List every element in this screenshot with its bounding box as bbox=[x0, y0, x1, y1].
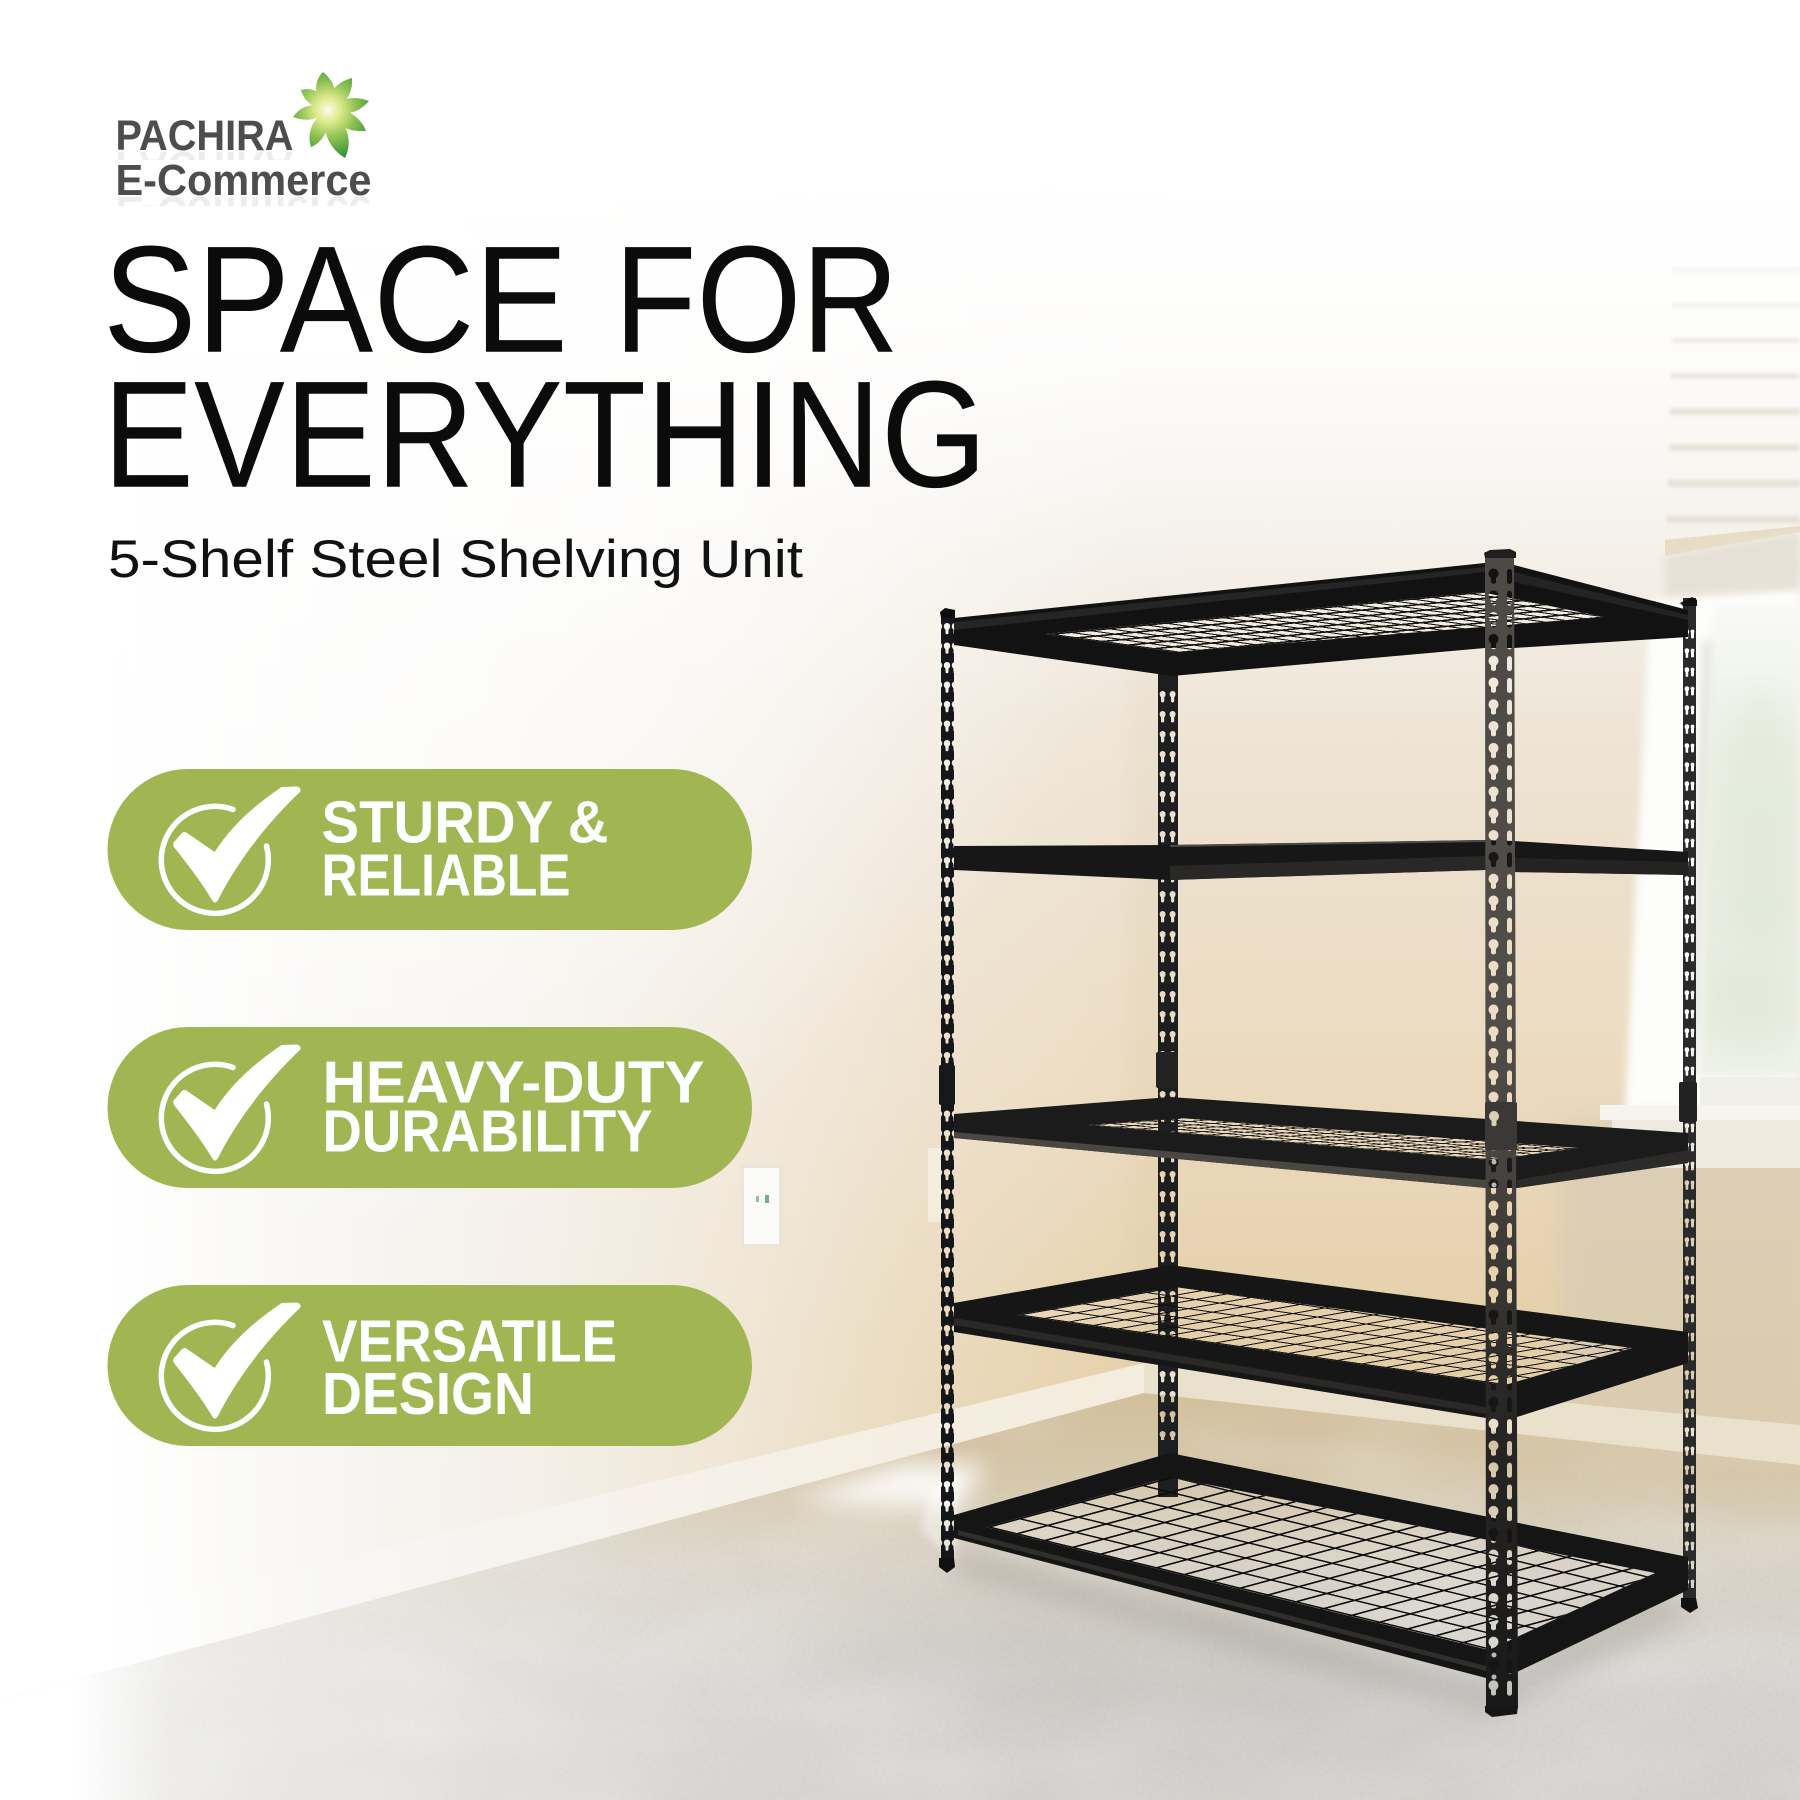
icon: check mark bbox=[161, 786, 301, 913]
shelf 5 bbox=[954, 1453, 1688, 1678]
baseboard left bbox=[0, 1363, 1144, 1700]
badge text: STURDY & bbox=[322, 790, 608, 856]
left post bbox=[939, 608, 955, 1573]
fasteners bbox=[1492, 1160, 1496, 1680]
wall corner shading bbox=[1130, 600, 1165, 1400]
badge text bbox=[322, 1050, 704, 1165]
badge: heavy-duty durability bbox=[108, 1027, 752, 1188]
shelf 1 bbox=[954, 563, 1688, 676]
badge text: DESIGN bbox=[322, 1361, 534, 1427]
window glass and sill bbox=[1600, 590, 1800, 1168]
badge text bbox=[322, 790, 608, 909]
title: SPACE bbox=[103, 215, 568, 385]
icon: check mark bbox=[161, 1302, 301, 1429]
logo wordmark bbox=[116, 113, 372, 205]
upper left white fade bbox=[0, 0, 1200, 1300]
subtitle: 5-Shelf Steel Shelving Unit bbox=[108, 530, 803, 589]
logo reflection: PACHIRA bbox=[116, 142, 294, 189]
front post bbox=[1484, 549, 1518, 1717]
title bbox=[103, 215, 987, 520]
steel shelving unit bbox=[939, 549, 1698, 1717]
badge text: HEAVY-DUTY bbox=[322, 1050, 704, 1116]
top white fade bbox=[0, 0, 1800, 720]
badge text: RELIABLE bbox=[322, 843, 570, 909]
badge: sturdy and reliable bbox=[108, 769, 752, 930]
shelf 3 bbox=[954, 1097, 1688, 1188]
shelf 2 bbox=[954, 840, 1688, 880]
logo flower bbox=[293, 72, 369, 158]
logo bbox=[118, 72, 370, 206]
badge text bbox=[322, 1309, 617, 1427]
badge text: VERSATILE bbox=[322, 1309, 617, 1375]
wall plate bbox=[743, 1167, 780, 1245]
badge text: DURABILITY bbox=[322, 1099, 652, 1165]
logo wordmark: PACHIRA bbox=[116, 113, 294, 160]
title: EVERYTHING bbox=[103, 350, 987, 520]
carpet floor bbox=[0, 1380, 1800, 1800]
title: FOR bbox=[614, 215, 899, 385]
shelf 4 bbox=[954, 1265, 1688, 1418]
logo reflection bbox=[118, 152, 370, 206]
icon: check mark bbox=[161, 1044, 301, 1171]
back post bbox=[1156, 652, 1178, 1497]
logo reflection: E-Commerce bbox=[116, 187, 372, 235]
baseboard right bbox=[1144, 1363, 1800, 1465]
badge: versatile design bbox=[108, 1285, 752, 1446]
left white fade bbox=[0, 0, 1300, 1800]
window blinds bbox=[1665, 268, 1800, 596]
right wall lower tone bbox=[1560, 1120, 1800, 1480]
second wall plate bbox=[928, 1148, 942, 1222]
right post bbox=[1679, 597, 1698, 1613]
logo wordmark: E-Commerce bbox=[116, 157, 372, 205]
